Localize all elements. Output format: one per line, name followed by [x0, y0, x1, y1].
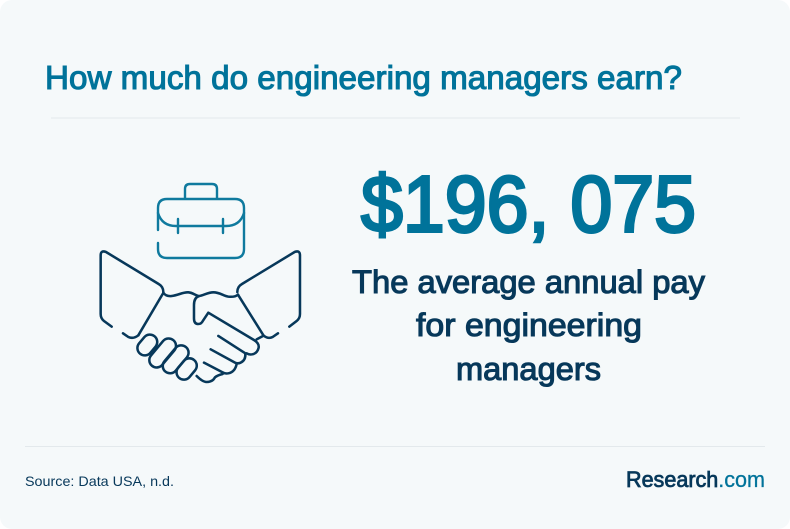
source note: Source: Data USA, n.d. — [25, 473, 174, 489]
description text — [352, 264, 705, 387]
description text: managers — [456, 351, 601, 387]
description text: for engineering — [416, 307, 642, 343]
icon: briefcase — [158, 184, 244, 258]
icon: handshake — [101, 251, 300, 383]
logo: Research.com: Research.com — [626, 467, 765, 492]
salary figure: $196, 075 — [361, 160, 696, 248]
title: How much do engineering managers earn? — [45, 59, 682, 96]
description text: The average annual pay — [352, 264, 705, 300]
